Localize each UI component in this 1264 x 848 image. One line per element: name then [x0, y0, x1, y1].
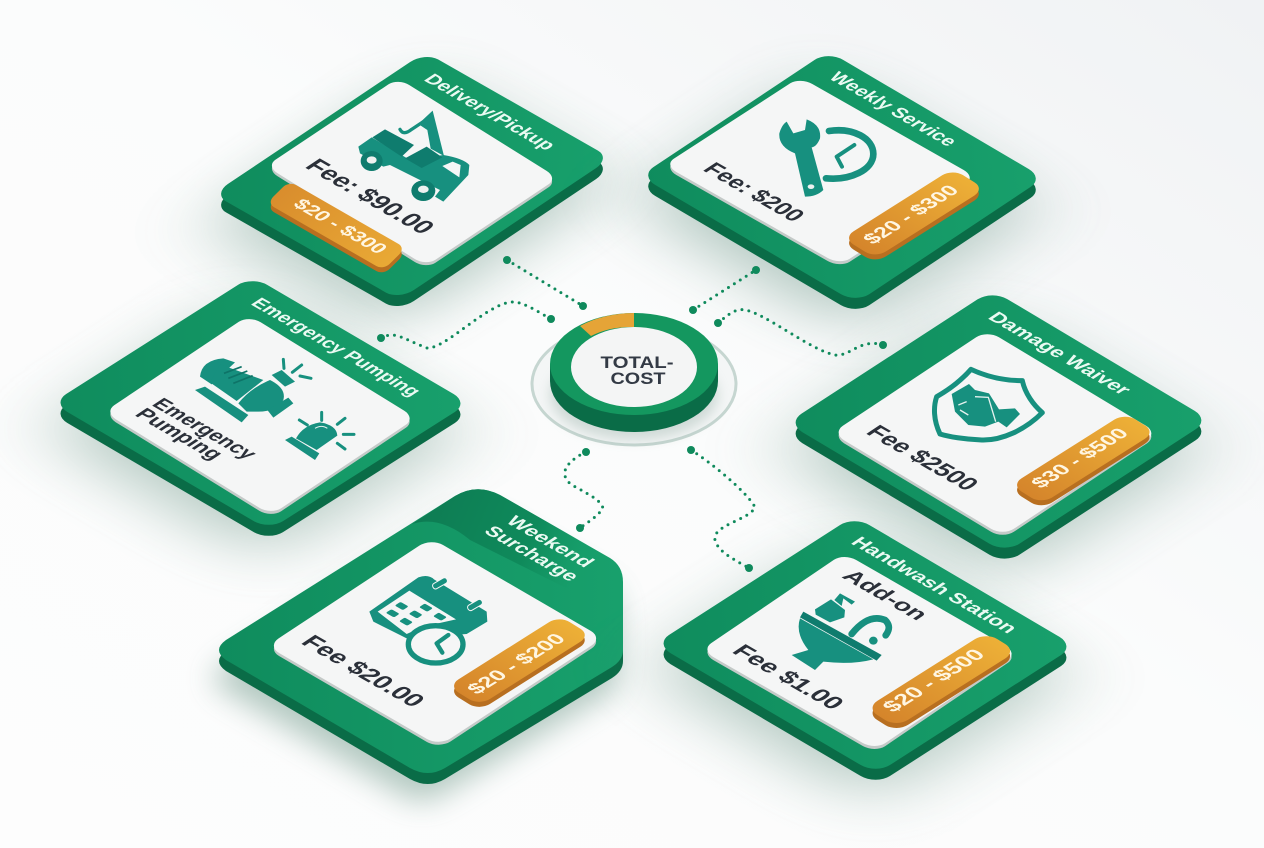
connector: delivery to centre: [503, 256, 587, 310]
panel: Emergency Pumping: [46, 276, 469, 558]
connector: weekend to centre: [565, 448, 603, 532]
icon: tow truck: [358, 111, 469, 202]
heading: Surcharge: [479, 523, 583, 585]
price pill: $20 - $300: [288, 196, 391, 257]
price pill: [843, 169, 985, 263]
heading: Handwash Station: [846, 534, 1022, 637]
icon: pump and siren: [195, 358, 354, 460]
centre label: [600, 353, 674, 388]
icon: calendar and clock: [369, 576, 487, 663]
centre label: COST: [610, 369, 666, 388]
heading: [479, 513, 598, 585]
price pill: $20 - $500: [878, 646, 990, 716]
panel: Weekly Service: [634, 51, 1044, 331]
price pill: $20 - $200: [463, 631, 571, 698]
centre total cost donut: [532, 313, 736, 445]
fee text: Fee: $90.00: [299, 155, 441, 238]
fee text: Fee $2500: [860, 421, 984, 495]
price pill: [448, 616, 591, 711]
body text: Emergency: [147, 395, 262, 463]
heading: Damage Waiver: [983, 309, 1136, 399]
heading: Emergency Pumping: [246, 295, 425, 400]
connector: handwash to centre: [687, 446, 755, 572]
orange segment: [580, 313, 634, 336]
heading: Weekly Service: [824, 69, 961, 150]
price pill: $30 - $500: [1027, 425, 1134, 492]
connector: emergency to centre: [377, 302, 555, 348]
icon: shield and handshake: [934, 369, 1042, 440]
panel: Handwash Station: [649, 516, 1075, 802]
connector: weekly to centre: [689, 266, 760, 314]
centre label: TOTAL-: [600, 353, 674, 372]
connector: damage to centre: [714, 310, 887, 355]
panel: Damage Waiver: [781, 290, 1210, 581]
icon: wrench and clock: [779, 119, 873, 197]
panel: Delivery/Pickup: [207, 52, 611, 328]
price pill: [866, 632, 1017, 732]
fee text: Fee: $200: [698, 158, 811, 225]
price pill: [267, 181, 406, 275]
fee text: Fee $20.00: [295, 631, 431, 711]
panel: Weekend Surcharge: [213, 489, 623, 801]
heading: Weekend: [501, 513, 598, 571]
body text: Pumping: [130, 405, 228, 463]
fee text: Fee $1.00: [727, 640, 850, 713]
icon: sink and soap: [792, 593, 889, 670]
body text: Add-on: [837, 566, 934, 624]
price pill: [1011, 413, 1156, 509]
price pill: $20 - $300: [859, 182, 964, 248]
heading: Delivery/Pickup: [419, 71, 560, 154]
